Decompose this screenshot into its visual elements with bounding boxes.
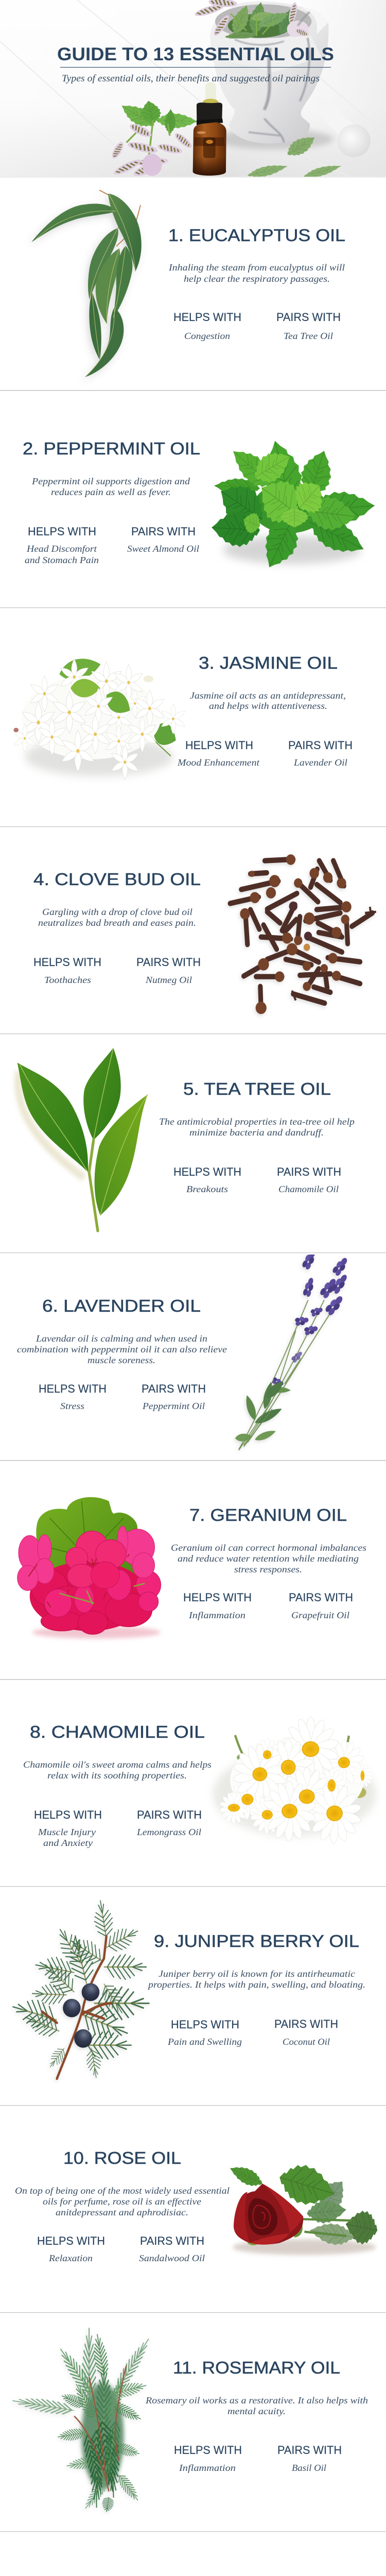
description — [168, 262, 345, 284]
heading: 5. TEA TREE OIL — [183, 1079, 331, 1098]
pairs with — [136, 956, 201, 985]
panel: 11 rosemary oil — [0, 2328, 386, 2532]
panel: 4 clove bud oil — [0, 854, 386, 1035]
helps with: HELPS WITH — [174, 2444, 242, 2456]
description: mental acuity. — [227, 2406, 286, 2416]
icon: juniper branch with berries — [9, 1899, 149, 2079]
panel: 6 lavender oil — [0, 1255, 386, 1461]
icon: cloves — [230, 854, 376, 1014]
description: anitdepressant and aphrodisiac. — [56, 2207, 188, 2217]
icon: mint sprig with lilac flowers — [110, 99, 198, 179]
pairs with: Basil Oil — [292, 2463, 326, 2473]
helps with: HELPS WITH — [39, 1382, 107, 1395]
panel: 2 peppermint oil — [0, 439, 386, 608]
pairs with — [277, 2444, 342, 2473]
heading: 7. GERANIUM OIL — [189, 1505, 347, 1524]
pairs with: Grapefruit Oil — [291, 1610, 349, 1620]
herbs in mortar — [194, 0, 310, 41]
heading: 6. LAVENDER OIL — [42, 1296, 201, 1315]
helps with: HELPS WITH — [183, 1591, 252, 1604]
icon: loose mint leaves — [246, 131, 343, 181]
heading: 8. CHAMOMILE OIL — [30, 1722, 205, 1741]
pairs with: PAIRS WITH — [136, 956, 201, 969]
helps with: Breakouts — [186, 1184, 228, 1194]
pairs with: PAIRS WITH — [131, 525, 196, 538]
pairs with: PAIRS WITH — [276, 311, 341, 324]
pairs with: Sandalwood Oil — [139, 2253, 205, 2263]
pairs with: Coconut Oil — [283, 2037, 330, 2047]
pairs with: Chamomile Oil — [278, 1184, 339, 1194]
pairs with — [289, 1591, 353, 1620]
description: neutralizes bad breath and eases pain. — [38, 918, 196, 928]
panel: 5 tea tree oil — [0, 1048, 386, 1253]
helps with — [25, 525, 99, 565]
heading: 10. ROSE OIL — [63, 2148, 181, 2167]
helps with — [183, 1591, 252, 1620]
pairs with: PAIRS WITH — [288, 739, 353, 752]
description: Gargling with a drop of clove bud oil — [42, 907, 192, 917]
helps with: Muscle Injury — [38, 1827, 96, 1837]
icon: lavender sprigs — [235, 1248, 350, 1450]
description — [38, 907, 196, 928]
description: and reduce water retention while mediating — [178, 1553, 359, 1564]
helps with — [33, 956, 101, 985]
helps with: HELPS WITH — [185, 739, 253, 752]
subtitle: Types of essential oils, their benefits and suggested oil pairings — [62, 73, 320, 84]
icon: jasmine flowers — [13, 654, 186, 779]
helps with — [37, 2234, 105, 2263]
helps with: Pain and Swelling — [167, 2037, 242, 2047]
pairs with: PAIRS WITH — [277, 1165, 341, 1178]
helps with: and Anxiety — [43, 1838, 93, 1848]
description — [23, 1759, 212, 1781]
description: reduces pain as well as fever. — [51, 487, 171, 497]
helps with: and Stomach Pain — [25, 555, 99, 565]
icon: geranium flowers — [17, 1497, 161, 1638]
pairs with — [276, 311, 341, 341]
panel: 7 geranium oil — [0, 1497, 386, 1680]
helps with: HELPS WITH — [28, 525, 96, 538]
mortar front rim and veining — [230, 11, 321, 143]
helps with: Congestion — [184, 331, 230, 341]
description: Juniper berry oil is known for its antirheumatic — [159, 1969, 355, 1979]
panel: 1 eucalyptus oil — [0, 190, 386, 391]
description: minimize bacteria and dandruff. — [189, 1127, 324, 1138]
panel: 9 juniper berry oil — [0, 1900, 386, 2106]
helps with: Head Discomfort — [26, 544, 97, 554]
icon: rosemary sprigs — [12, 2328, 153, 2513]
helps with: Relaxation — [48, 2253, 93, 2263]
description: properties. It helps with pain, swelling, and bloating. — [147, 1979, 365, 1990]
icon: amber dropper bottle — [193, 82, 226, 176]
description: and helps with attentiveness. — [209, 701, 327, 711]
pairs with — [139, 2234, 205, 2263]
description: combination with peppermint oil it can also relieve — [17, 1344, 227, 1354]
description — [190, 690, 346, 711]
icon: marble pestle — [340, 125, 371, 157]
description: Inhaling the steam from eucalyptus oil will — [168, 262, 345, 273]
pairs with: Nutmeg Oil — [145, 975, 192, 985]
pairs with: PAIRS WITH — [140, 2234, 204, 2247]
description — [31, 476, 190, 497]
pairs with — [142, 1382, 206, 1411]
pairs with: PAIRS WITH — [137, 1808, 202, 1821]
pairs with — [136, 1808, 202, 1837]
description: The antimicrobial properties in tea-tree oil help — [159, 1116, 355, 1127]
helps with: HELPS WITH — [33, 956, 101, 969]
heading: 4. CLOVE BUD OIL — [33, 870, 201, 889]
icon: mint sprig — [211, 435, 376, 575]
helps with: Toothaches — [44, 975, 91, 985]
icon: eucalyptus branch — [31, 190, 142, 377]
helps with: Mood Enhancement — [177, 757, 260, 768]
panel: 8 chamomile oil — [0, 1717, 386, 1887]
helps with: HELPS WITH — [171, 2018, 239, 2031]
description — [17, 1333, 227, 1365]
description — [171, 1543, 366, 1574]
helps with: HELPS WITH — [34, 1808, 102, 1821]
helps with: Stress — [60, 1401, 84, 1411]
description: Chamomile oil's sweet aroma calms and helps — [23, 1759, 212, 1770]
helps with: Inflammation — [179, 2463, 236, 2473]
description — [15, 2185, 230, 2217]
panel: header — [0, 0, 386, 178]
pairs with: Tea Tree Oil — [284, 331, 333, 341]
helps with: HELPS WITH — [173, 1165, 241, 1178]
description: Geranium oil can correct hormonal imbalances — [171, 1543, 366, 1553]
helps with — [167, 2018, 242, 2047]
heading: 11. ROSEMARY OIL — [173, 2358, 340, 2377]
pairs with: Lemongrass Oil — [136, 1827, 201, 1837]
description: On top of being one of the most widely used essential — [15, 2185, 230, 2196]
title: GUIDE TO 13 ESSENTIAL OILS — [57, 44, 334, 64]
icon: chamomile flowers — [213, 1717, 376, 1844]
helps with — [34, 1808, 102, 1848]
helps with — [177, 739, 260, 768]
pairs with — [274, 2018, 338, 2047]
pairs with: Peppermint Oil — [142, 1401, 205, 1411]
helps with: HELPS WITH — [37, 2234, 105, 2247]
header photo: mortar, herbs and oil bottle — [0, 0, 386, 181]
helps with — [39, 1382, 107, 1411]
pairs with: Lavender Oil — [293, 757, 347, 768]
description — [145, 2395, 368, 2416]
description: relax with its soothing properties. — [47, 1770, 187, 1781]
pairs with: Sweet Almond Oil — [127, 544, 199, 554]
heading: 1. EUCALYPTUS OIL — [168, 226, 345, 245]
pairs with — [127, 525, 199, 554]
helps with — [174, 2444, 242, 2473]
pairs with: PAIRS WITH — [142, 1382, 206, 1395]
pairs with: PAIRS WITH — [277, 2444, 342, 2456]
description: oils for perfume, rose oil is an effective — [43, 2196, 201, 2207]
description: muscle soreness. — [87, 1355, 155, 1365]
description: Lavendar oil is calming and when used in — [36, 1333, 207, 1344]
description: Rosemary oil works as a restorative. It also helps with — [145, 2395, 368, 2405]
heading: 3. JASMINE OIL — [199, 653, 338, 672]
pairs with: PAIRS WITH — [289, 1591, 353, 1604]
heading: 2. PEPPERMINT OIL — [23, 439, 200, 458]
pairs with: PAIRS WITH — [274, 2018, 338, 2030]
panel: 3 jasmine oil — [0, 653, 386, 827]
description: help clear the respiratory passages. — [184, 274, 330, 284]
pairs with — [277, 1165, 341, 1194]
description — [147, 1969, 365, 1990]
heading: 9. JUNIPER BERRY OIL — [154, 1931, 359, 1951]
description: Jasmine oil acts as an antidepressant, — [190, 690, 346, 701]
helps with — [173, 1165, 241, 1194]
description: stress responses. — [234, 1564, 302, 1574]
helps with — [173, 311, 241, 341]
icon: tea tree leaves — [17, 1048, 148, 1231]
description: Peppermint oil supports digestion and — [31, 476, 190, 486]
panel: 10 rose oil — [0, 2148, 386, 2313]
helps with: Inflammation — [188, 1610, 245, 1620]
icon: red rose — [227, 2158, 380, 2255]
pairs with — [288, 739, 353, 768]
helps with: HELPS WITH — [173, 311, 241, 324]
description — [159, 1116, 355, 1138]
icon: marble mortar — [210, 2, 328, 143]
